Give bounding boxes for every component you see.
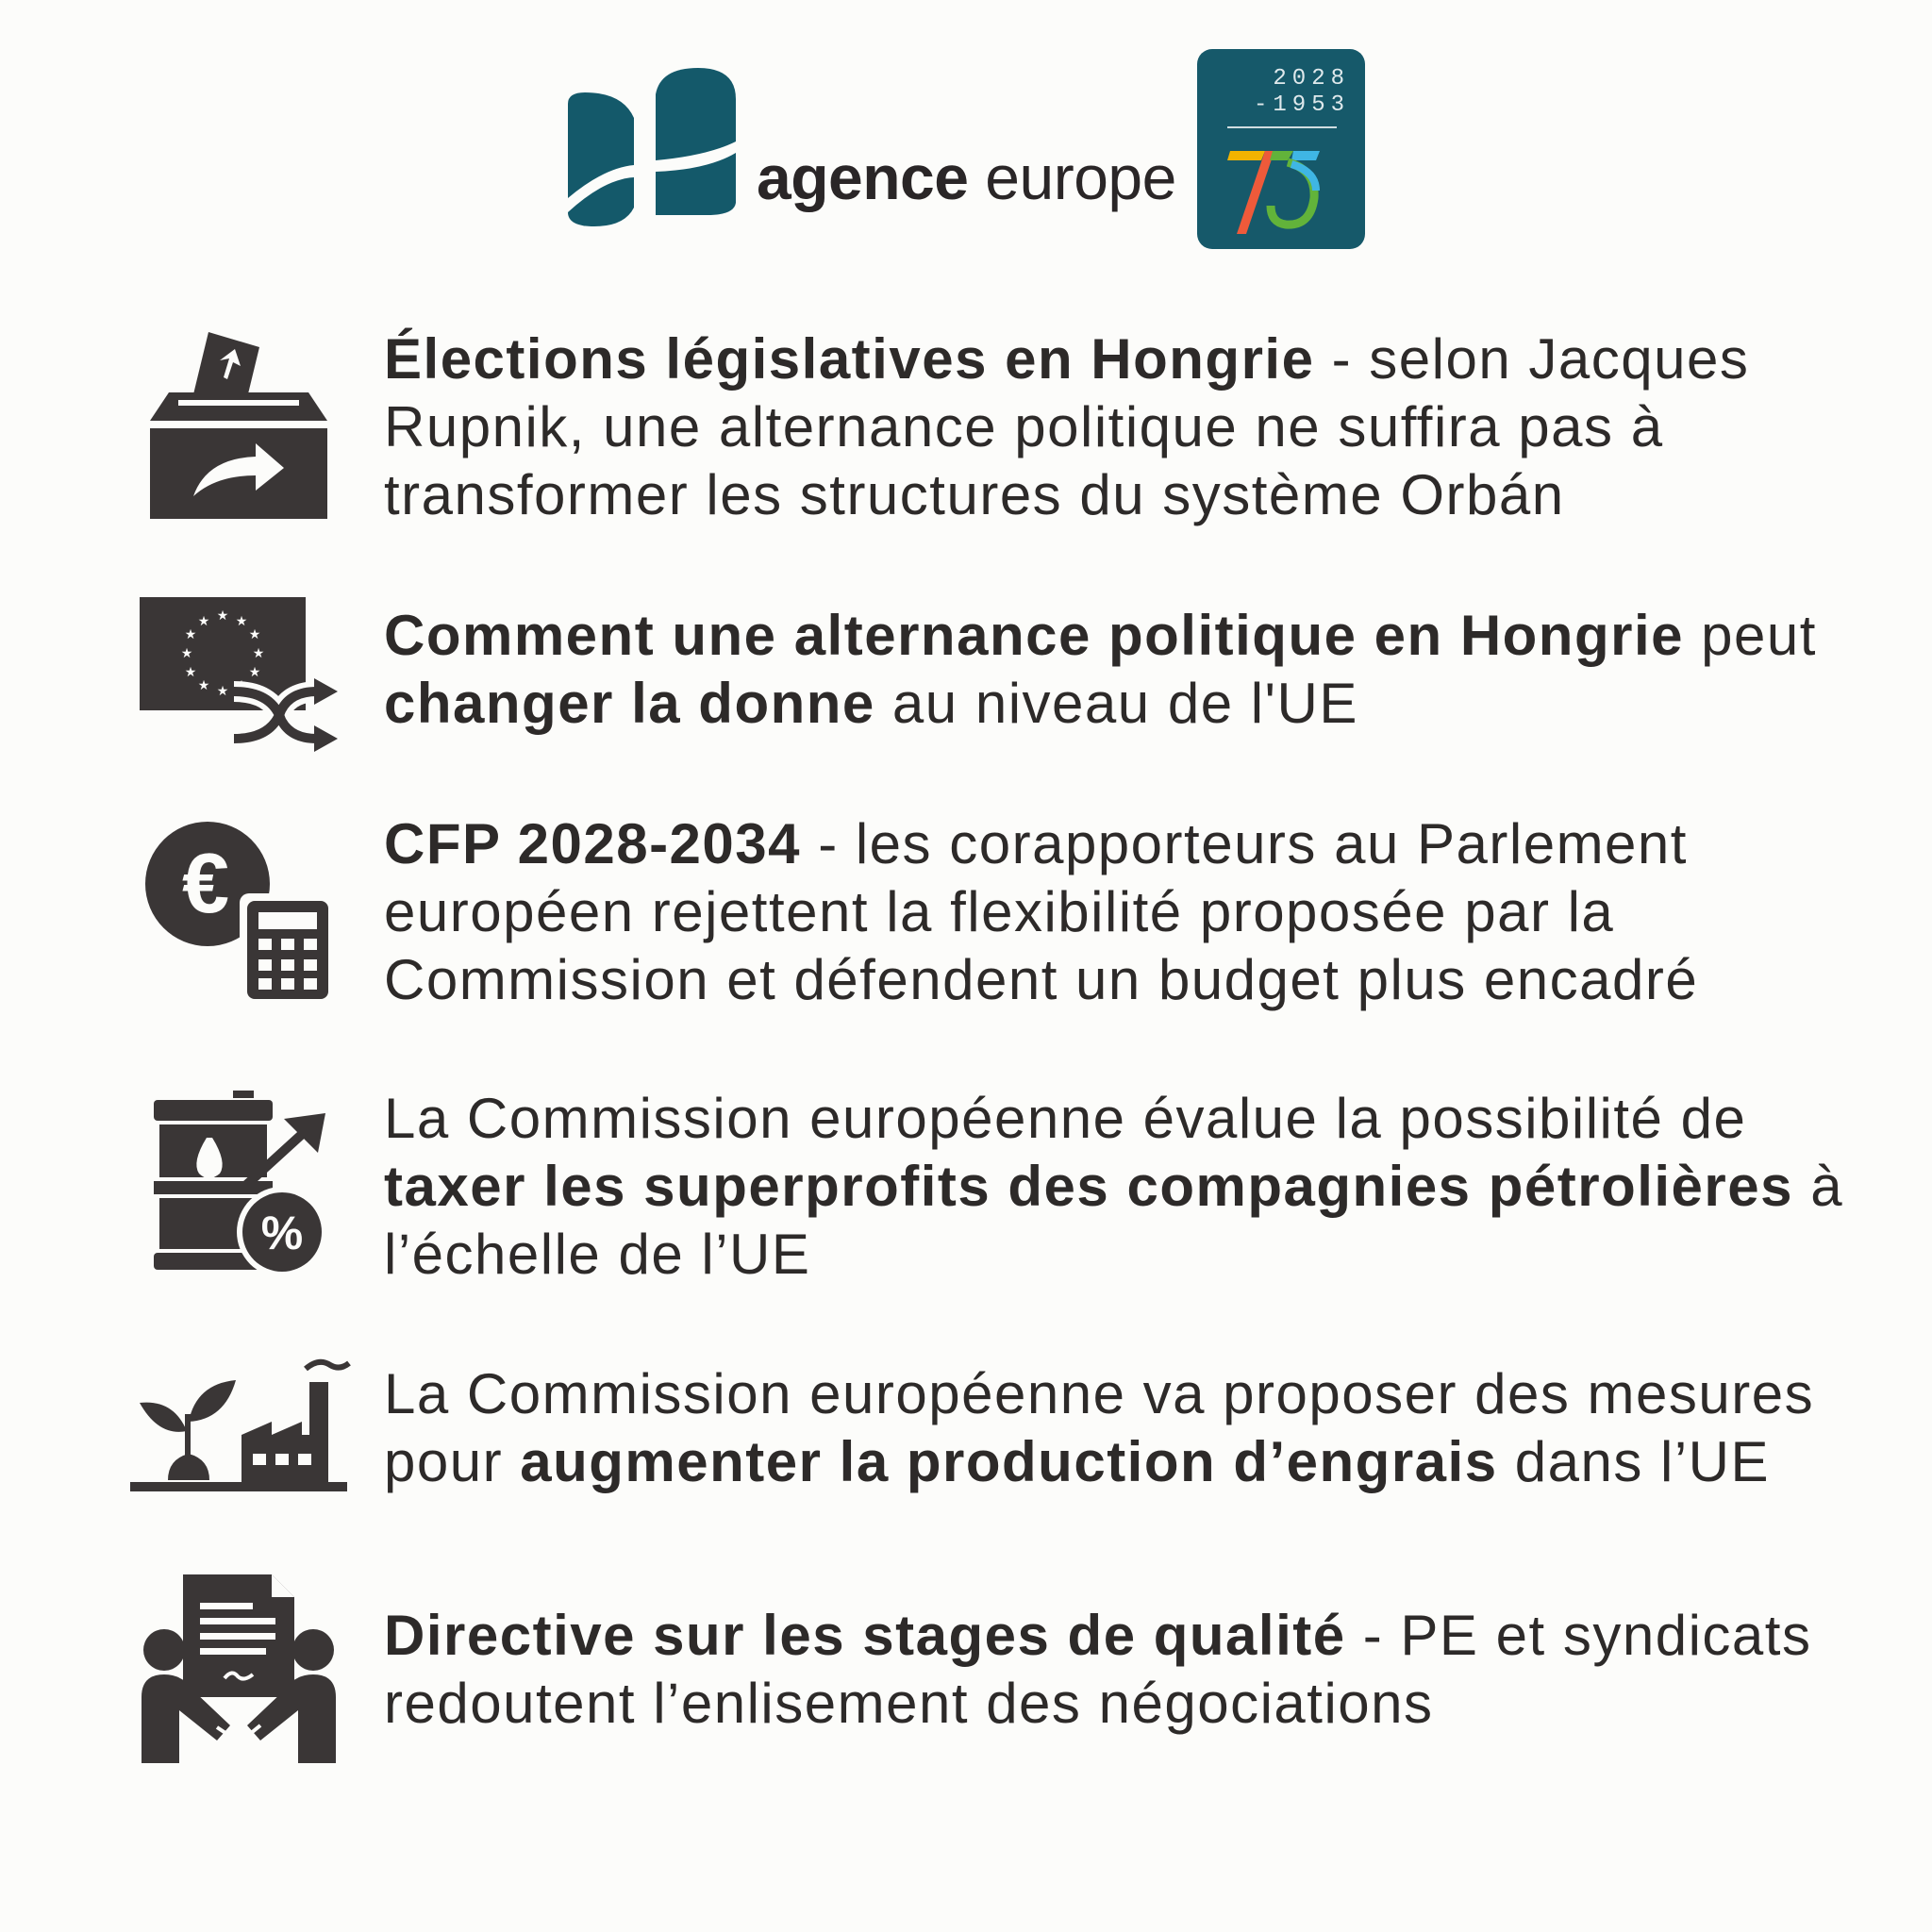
icon: EU flag with shuffle arrows: ★ <box>253 646 264 661</box>
icon: EU flag with shuffle arrows: ★ <box>181 646 192 661</box>
badge 75 years: 2028 <box>1273 66 1350 92</box>
item 4 text: La Commission européenne évalue la possibilité de <box>384 1087 1746 1150</box>
icon: plant and factory <box>130 1358 351 1491</box>
icon: EU flag with shuffle arrows: ★ <box>236 678 247 693</box>
item 3 text: Commission et défendent un budget plus encadré <box>384 948 1698 1011</box>
item 3 text: européen rejettent la flexibilité proposée par la <box>384 880 1614 943</box>
logo text: agence europe <box>757 142 1176 212</box>
badge 75 years <box>1197 49 1365 249</box>
item 6 text: redoutent l’enlisement des négociations <box>384 1672 1434 1735</box>
item 1 text: transformer les structures du système Orbán <box>384 463 1565 526</box>
icon: oil barrel with percent: % <box>261 1207 303 1259</box>
item 2 text <box>384 604 1817 735</box>
item 1 text: Élections législatives en Hongrie - selon Jacques <box>384 327 1749 391</box>
item 1 text: Rupnik, une alternance politique ne suffira pas à <box>384 395 1664 458</box>
item 5 text: pour augmenter la production d’engrais dans l’UE <box>384 1430 1770 1493</box>
icon: EU flag with shuffle arrows <box>140 597 338 752</box>
item 5 text <box>384 1362 1814 1493</box>
icon: EU flag with shuffle arrows: ★ <box>249 627 260 642</box>
icon: EU flag with shuffle arrows: ★ <box>185 627 196 642</box>
item 1 text <box>384 327 1749 526</box>
badge 75 years: -1953 <box>1254 92 1350 118</box>
item 4 text: taxer les superprofits des compagnies pétrolières à <box>384 1155 1843 1218</box>
item 3 text: CFP 2028-2034 - les corapporteurs au Parlement <box>384 812 1688 875</box>
icon: EU flag with shuffle arrows: ★ <box>217 684 228 699</box>
icon: EU flag with shuffle arrows: ★ <box>236 614 247 629</box>
icon: EU flag with shuffle arrows: ★ <box>198 678 209 693</box>
item 2 text: changer la donne au niveau de l'UE <box>384 672 1358 735</box>
item 5 text: La Commission européenne va proposer des mesures <box>384 1362 1814 1425</box>
item 4 text: l’échelle de l’UE <box>384 1223 810 1286</box>
icon: ballot box <box>150 332 327 519</box>
item 6 text: Directive sur les stages de qualité - PE et syndicats <box>384 1604 1811 1667</box>
icon: euro coin and calculator <box>145 822 328 999</box>
icon: EU flag with shuffle arrows: ★ <box>185 665 196 680</box>
icon: contract and handshake <box>142 1574 336 1763</box>
item 2 text: Comment une alternance politique en Hongrie peut <box>384 604 1817 667</box>
icon: EU flag with shuffle arrows: ★ <box>249 665 260 680</box>
item 6 text <box>384 1604 1811 1735</box>
logo: agence europe <box>568 49 1365 249</box>
icon: euro coin and calculator: € <box>182 837 229 931</box>
logo mark <box>568 68 736 226</box>
item 3 text <box>384 812 1698 1011</box>
icon: oil barrel with percent <box>154 1091 325 1272</box>
item 4 text <box>384 1087 1843 1286</box>
icon: EU flag with shuffle arrows: ★ <box>217 608 228 624</box>
icon: EU flag with shuffle arrows: ★ <box>198 614 209 629</box>
